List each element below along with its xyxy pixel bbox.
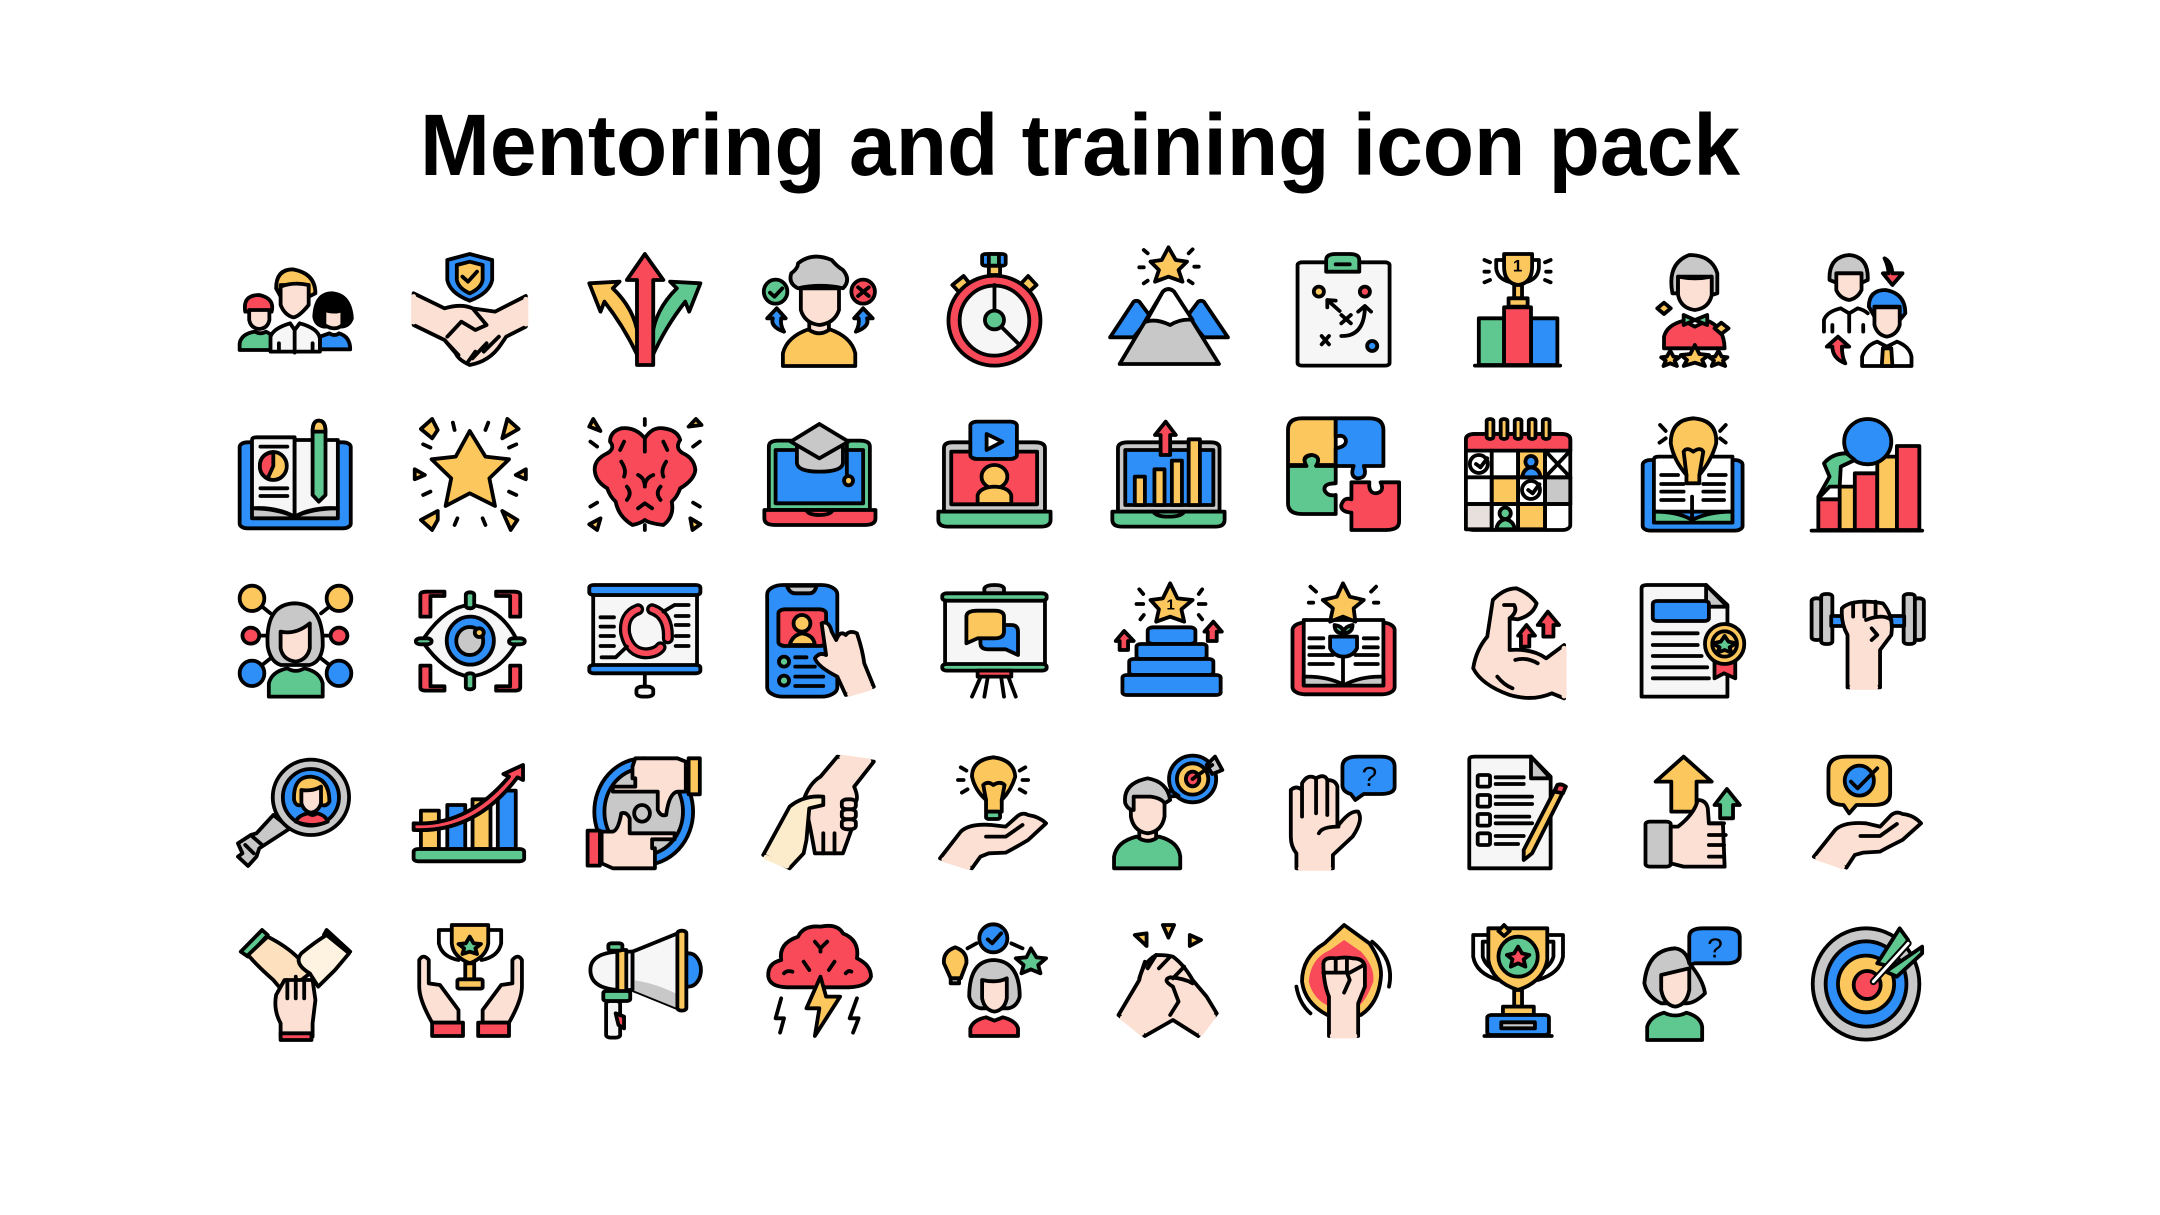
icon: helping hands <box>763 757 874 868</box>
icon: brainstorm cloud <box>768 926 871 1036</box>
icon: woman with question: ? <box>1707 932 1723 963</box>
icon: checklist with pencil <box>1469 757 1566 868</box>
icon: three hands together <box>241 930 350 1040</box>
icon: certificate <box>1642 585 1744 697</box>
icon: book with pen <box>240 421 351 528</box>
icon: fist in flame <box>1296 925 1390 1036</box>
icon: woman with ideas <box>944 924 1046 1036</box>
icon: mentor exchange <box>1824 255 1911 366</box>
icon: podium trophy <box>1475 254 1560 366</box>
icon: raised hand with question <box>1291 757 1395 868</box>
icon: stopwatch <box>948 254 1040 366</box>
icon: presentation screen <box>589 585 700 697</box>
icon: eye focus <box>416 592 525 691</box>
icon: strategy clipboard <box>1298 254 1390 366</box>
icon: three direction arrows <box>589 254 700 365</box>
icon: hands framing focus <box>588 758 700 868</box>
icon: raised hand with question: ? <box>1362 761 1377 792</box>
icon: steps with star <box>1116 583 1222 695</box>
icon: phone with touching hand <box>767 585 874 697</box>
icon: hands under trophy <box>419 925 522 1036</box>
icon: pushing ball up bar chart <box>1812 419 1922 531</box>
icon: brain <box>589 419 702 530</box>
icon: board with speech bubbles <box>942 585 1047 697</box>
icon: megaphone <box>590 931 701 1038</box>
icon: growth chart with arrow <box>414 765 524 861</box>
icon: key with magnifier portrait <box>238 760 349 866</box>
icon: steps with star: 1 <box>1167 596 1175 613</box>
icon: star performer <box>1657 255 1729 366</box>
icon: person with target <box>1114 756 1222 868</box>
icon: book with light bulb <box>1643 418 1743 531</box>
icon: hand with check bubble <box>1814 757 1921 868</box>
icon: clasped hands <box>1119 925 1217 1036</box>
title: Mentoring and training icon pack <box>420 97 1740 194</box>
icon: calendar <box>1466 419 1570 530</box>
icon: trophy <box>1473 925 1563 1036</box>
icon: hand with dumbbell <box>1812 594 1924 687</box>
icon: handshake with shield <box>414 254 526 365</box>
icon: laptop with video <box>938 422 1051 527</box>
icon: laptop with graduation cap <box>764 424 875 525</box>
icon: star burst <box>415 419 526 530</box>
icon: team <box>240 269 352 353</box>
icon: podium trophy: 1 <box>1513 257 1522 276</box>
icon: book with plant <box>1292 583 1395 694</box>
icon: target with arrow <box>1813 928 1922 1040</box>
icon: woman mind map <box>240 586 351 697</box>
icon: mountain with star <box>1110 247 1228 364</box>
icon: laptop with growth bars <box>1112 422 1225 527</box>
icon: flexed arm <box>1473 588 1564 698</box>
icon: puzzle <box>1288 418 1399 530</box>
icon: woman with question <box>1644 928 1740 1040</box>
icon: hand with light bulb <box>940 757 1046 868</box>
icon: thumbs up with arrows <box>1645 757 1740 867</box>
icon: person choosing <box>764 257 875 366</box>
